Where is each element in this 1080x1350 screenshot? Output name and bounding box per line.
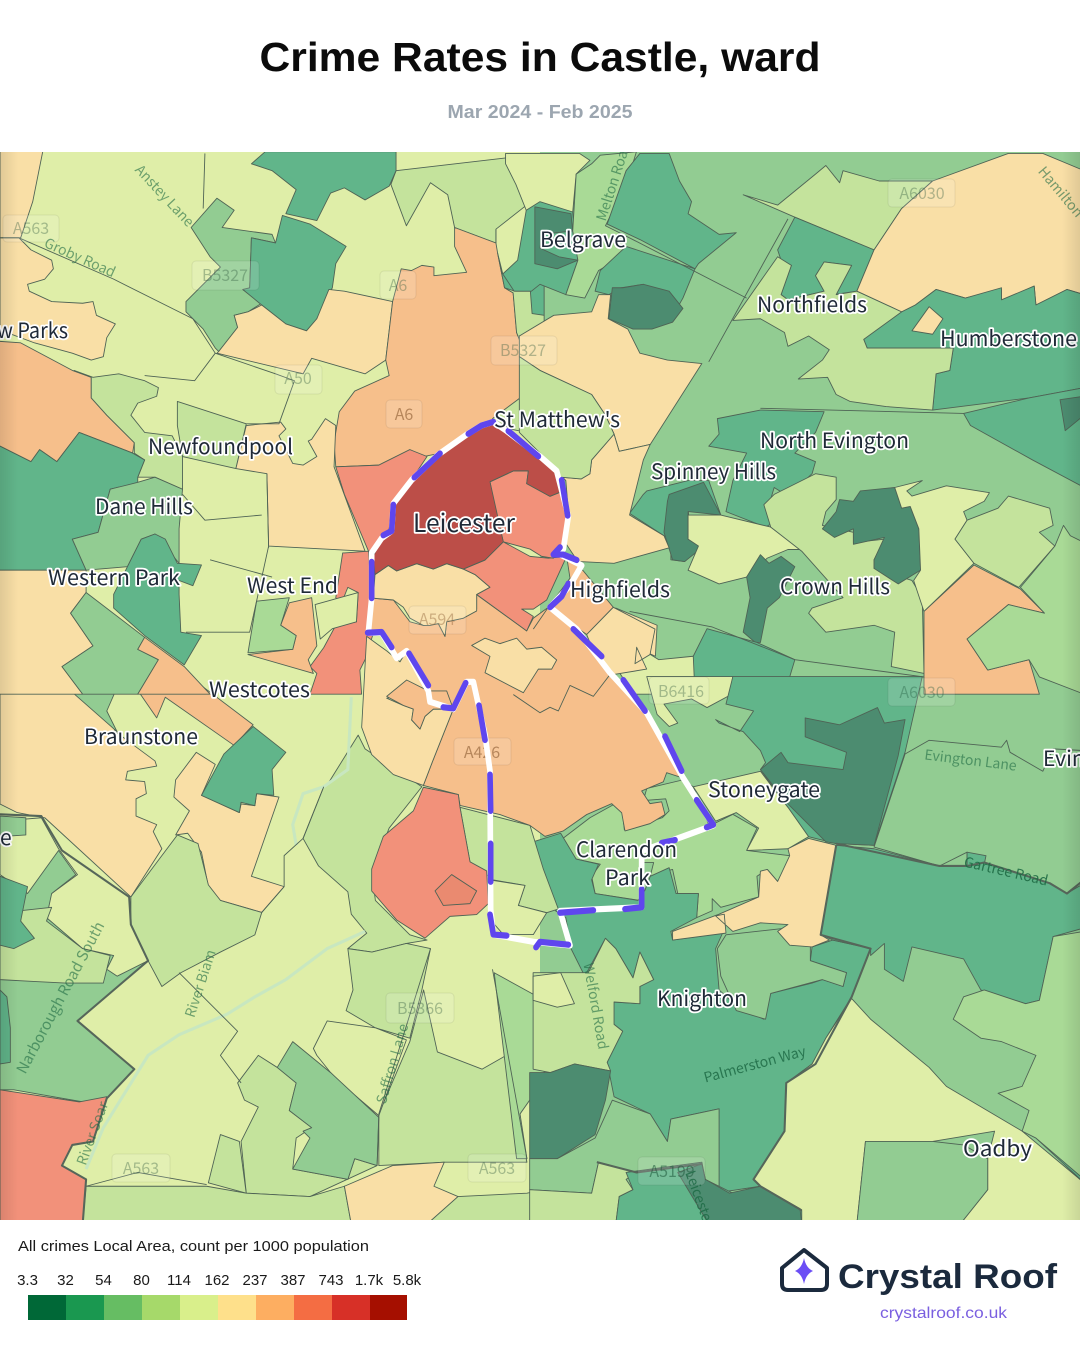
place label: Oadby: Oadby bbox=[963, 1133, 1032, 1163]
ward area: salmon centre-south bbox=[463, 542, 567, 631]
ward area: lime pocket bbox=[491, 880, 547, 935]
legend values: 32 bbox=[57, 1272, 74, 1289]
legend values: 237 bbox=[242, 1272, 268, 1289]
road shields and road names: A6 bbox=[389, 272, 407, 296]
place label: Leicester: Leicester bbox=[413, 504, 515, 540]
ward area: Highfields orange wedge bbox=[554, 562, 614, 635]
road shields and road names: A6030 bbox=[899, 180, 945, 204]
legend values: 54 bbox=[95, 1272, 112, 1289]
ward area: Leicester centre, highest crime bbox=[373, 422, 563, 575]
place label: Clarendon Park bbox=[576, 838, 678, 888]
road shields and road names: A563 bbox=[13, 215, 49, 239]
ward area: lightgreen south-west of Clarendon bbox=[460, 807, 558, 913]
place label: Belgrave: Belgrave bbox=[540, 224, 626, 254]
legend values: 114 bbox=[167, 1272, 191, 1289]
legend values: 3.3 bbox=[17, 1272, 38, 1289]
road shields and road names: Melton Road bbox=[591, 139, 635, 223]
legend values: 5.8k bbox=[393, 1272, 422, 1289]
road shields and road names: Groby Road bbox=[41, 233, 119, 282]
legend bbox=[17, 1238, 422, 1320]
road shields and road names: A6 bbox=[395, 401, 413, 425]
place label: Newfoundpool: Newfoundpool bbox=[148, 431, 293, 461]
place label: Northfields: Northfields bbox=[757, 289, 867, 319]
legend values: 387 bbox=[280, 1272, 306, 1289]
logo url: crystalroof.co.uk bbox=[880, 1305, 1008, 1322]
road shields and road names: Evington Lane bbox=[923, 744, 1018, 776]
road shields and road names: A426 bbox=[464, 739, 500, 763]
road shields and road names: A563 bbox=[123, 1155, 159, 1179]
logo wordmark: Crystal Roof bbox=[838, 1258, 1058, 1296]
road shields and road names: A50 bbox=[284, 365, 312, 389]
place label: Highfields: Highfields bbox=[570, 574, 670, 604]
legend values: 162 bbox=[204, 1272, 230, 1289]
map area: north-east wards bbox=[503, 152, 1080, 694]
title: Crime Rates in Castle, ward bbox=[260, 34, 820, 80]
place label: Spinney Hills: Spinney Hills bbox=[651, 456, 776, 486]
place label: Western Park: Western Park bbox=[48, 562, 180, 592]
road shields and road names: A594 bbox=[419, 606, 455, 630]
place label: Clarendon Park: Park bbox=[605, 862, 650, 892]
road shields and road names: River Biam bbox=[180, 947, 221, 1020]
ward area: salmon north-east bbox=[490, 471, 568, 558]
legend values: 80 bbox=[133, 1272, 150, 1289]
road shields and road names: Gartree Road bbox=[962, 852, 1050, 891]
ward area: orange notch bbox=[387, 680, 453, 729]
road shields and road names: A6030 bbox=[899, 679, 945, 703]
map area: south-east wards bbox=[530, 677, 1080, 1224]
place label: North Evington: North Evington bbox=[760, 425, 909, 455]
road shields and road names: A563 bbox=[479, 1155, 515, 1179]
logo: Crystal Roof bbox=[782, 1250, 1058, 1322]
road shields and road names: B6416 bbox=[658, 678, 704, 702]
road shields and road names: B5366 bbox=[397, 995, 443, 1019]
subtitle: date range: Mar 2024 - Feb 2025 bbox=[448, 102, 632, 122]
place label: Knighton: Knighton bbox=[657, 983, 747, 1013]
legend colour scale bbox=[28, 1295, 407, 1320]
road shields and road names: B5327 bbox=[202, 262, 248, 286]
place label: clipped letter: e bbox=[0, 822, 12, 852]
road shields and road names: B5327 bbox=[500, 337, 546, 361]
road shields and road names: Narborough Road South bbox=[11, 918, 109, 1077]
road shields and road names: A5199 bbox=[649, 1158, 695, 1182]
place label: Braunstone: Braunstone bbox=[84, 721, 198, 751]
ward area: cream cross bbox=[472, 638, 557, 693]
place label: Dane Hills: Dane Hills bbox=[95, 491, 193, 521]
area: salmon south of ward bbox=[372, 787, 488, 938]
place label: Crown Hills: Crown Hills bbox=[780, 571, 890, 601]
road shields and road names: Saffron Lane bbox=[371, 1021, 413, 1106]
legend values bbox=[17, 1272, 422, 1289]
map area: north-west wards bbox=[0, 150, 544, 694]
road shields and road names: River Soar bbox=[72, 1098, 113, 1168]
place label: Westcotes: Westcotes bbox=[209, 674, 310, 704]
map area: Castle ward interior and city centre bbox=[362, 422, 683, 938]
road shields and road names: Palmerston Way bbox=[701, 1041, 809, 1087]
ward area: orange city south bbox=[368, 595, 683, 836]
ward area: cream north of A594 bbox=[373, 564, 490, 636]
map area: south-west wards bbox=[0, 677, 544, 1224]
place label: Stoneygate: Stoneygate bbox=[708, 774, 820, 804]
place label: Humberstone: Humberstone bbox=[940, 323, 1077, 353]
icon: house with star bbox=[782, 1250, 827, 1290]
road shields and road names: Leicester bbox=[680, 1168, 719, 1230]
place label: St Matthew's: St Matthew's bbox=[494, 404, 620, 434]
road shields and road names: Welford Road bbox=[578, 961, 613, 1051]
ward area: cream east of boundary bbox=[587, 607, 655, 675]
legend title: All crimes Local Area, count per 1000 population bbox=[18, 1238, 369, 1255]
place label: West End: West End bbox=[247, 570, 338, 600]
road shields and road names: Anstey Lane bbox=[131, 160, 199, 231]
legend values: 1.7k bbox=[355, 1272, 384, 1289]
Castle ward boundary: white line with purple dashes bbox=[368, 422, 713, 947]
legend values: 743 bbox=[318, 1272, 344, 1289]
ward area: cream south-west bbox=[362, 636, 453, 785]
place label: Clarendon Park: Clarendon bbox=[576, 834, 677, 864]
